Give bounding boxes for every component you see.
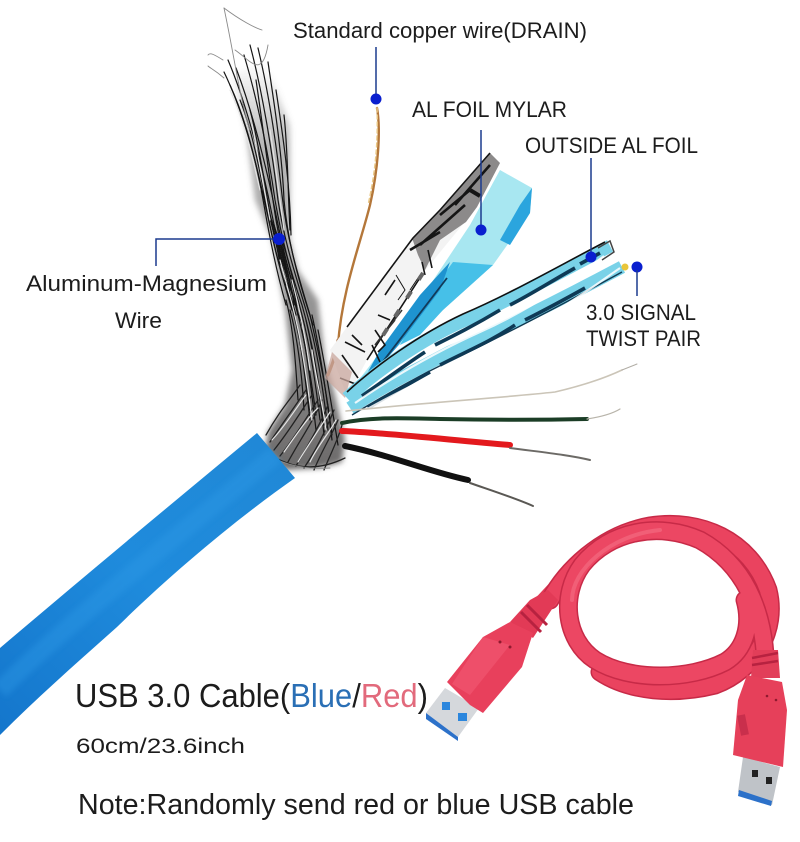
- red USB cable coil: [522, 524, 770, 691]
- red wire: [342, 431, 590, 460]
- label: 3.0 signal twist pair: [586, 262, 701, 351]
- right USB plug: [733, 650, 787, 806]
- label: standard copper wire: Standard copper wire(DRAIN): [293, 18, 587, 43]
- green wire: [342, 409, 620, 423]
- drain copper wire: [328, 108, 379, 375]
- aluminum-magnesium braid wire: [208, 8, 345, 470]
- label: AL foil mylar: AL FOIL MYLAR: [412, 97, 567, 122]
- AL foil mylar ribbon: [325, 153, 532, 398]
- length note: 60cm/23.6inch: [76, 735, 245, 758]
- label: 3.0 signal twist pair: 3.0 SIGNAL: [586, 300, 696, 325]
- outside AL foil twisted pair shields: [347, 241, 622, 415]
- label: aluminum-magnesium wire: Wire: [115, 308, 162, 333]
- blue outer cable jacket: [0, 433, 295, 735]
- label: AL foil mylar: [412, 97, 567, 236]
- label: aluminum-magnesium wire: [26, 233, 285, 333]
- title: USB 3.0 Cable (Blue/Red): USB 3.0 Cable(Blue/Red): [75, 677, 428, 714]
- black wire: [345, 446, 533, 506]
- left USB plug: [426, 590, 558, 741]
- signal pair tip: [622, 264, 628, 270]
- label: outside AL foil: [525, 133, 698, 262]
- label: aluminum-magnesium wire: Aluminum-Magnesium: [26, 271, 267, 296]
- label: outside AL foil: OUTSIDE AL FOIL: [525, 133, 698, 158]
- label: standard copper wire: [293, 18, 587, 104]
- random colour note: Note:Randomly send red or blue USB cable: [78, 789, 634, 821]
- white wire: [346, 364, 637, 411]
- label: 3.0 signal twist pair: TWIST PAIR: [586, 326, 701, 351]
